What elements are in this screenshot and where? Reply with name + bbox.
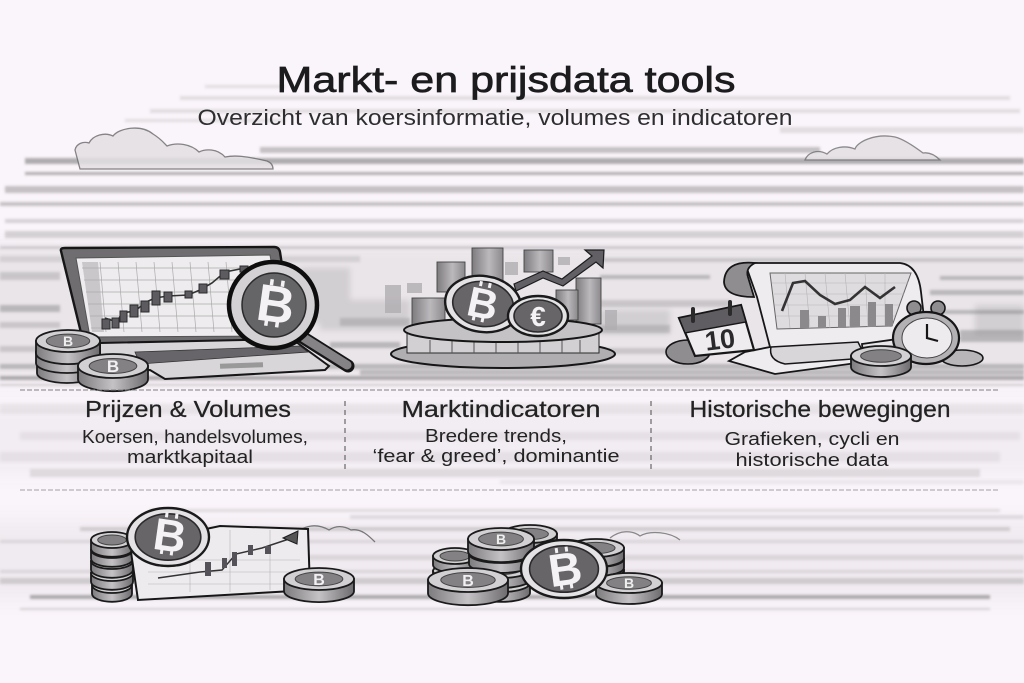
large bitcoin coin: B [150, 508, 190, 563]
background: soft grey washes [0, 245, 1024, 600]
bitcoin coin: B [463, 277, 503, 330]
calendar: 10 [703, 323, 737, 357]
small coin: B [313, 572, 325, 589]
divider: lower dashed line [20, 489, 1000, 491]
cloud: top left [75, 128, 273, 169]
bitcoin coin [441, 271, 525, 337]
pale distant bars [385, 257, 617, 330]
coin stack [91, 532, 133, 602]
front coin [78, 354, 148, 391]
small coin [284, 568, 354, 602]
coin stack [36, 330, 100, 383]
divider: column one and two [344, 401, 346, 469]
cloud: top right [805, 136, 940, 160]
chart card [131, 526, 310, 600]
description line 1: Koersen, handelsvolumes, [82, 427, 308, 447]
subtitle: Overzicht van koersinformatie, volumes en indicatoren [198, 105, 792, 130]
platform [391, 318, 615, 368]
title: Markt- en prijsdata tools [276, 59, 736, 100]
divider: upper dashed line [20, 389, 1000, 391]
bars [412, 248, 601, 326]
cloud: bottom centre [295, 526, 375, 542]
coin stack: B [63, 333, 73, 349]
laptop lid [61, 247, 294, 345]
cloud: bottom right [610, 532, 680, 540]
column: prijzen en volumes [82, 396, 308, 467]
description line 2: ‘fear & greed’, dominantie [372, 446, 620, 466]
heading: Historische bewegingen [690, 396, 950, 422]
rising arrow [514, 250, 604, 291]
laptop base and keyboard [100, 339, 329, 379]
chart scroll [724, 263, 926, 374]
laptop screen with chart [76, 255, 284, 337]
heading: Prijzen & Volumes [85, 396, 291, 422]
clock [893, 301, 959, 364]
large bitcoin coin [127, 508, 209, 566]
front left coin [428, 568, 508, 605]
illustration: piles of bitcoin coins [428, 525, 662, 605]
coin right of clock [941, 350, 983, 366]
large bitcoin coin [521, 540, 607, 598]
calendar [679, 302, 754, 357]
description line 2: historische data [736, 450, 890, 470]
illustration: coin stack with price chart card [91, 508, 354, 602]
middle pile [468, 528, 534, 602]
right pile [568, 539, 624, 587]
illustration: calendar, chart scroll and clock [666, 263, 983, 377]
euro coin: € [530, 301, 546, 332]
background: distant skyline shading [300, 268, 1024, 335]
heading: Marktindicatoren [402, 396, 600, 422]
left pile [433, 548, 477, 586]
divider: column two and three [650, 401, 652, 469]
front left coin: B [462, 573, 474, 590]
magnifier: B [253, 274, 298, 336]
coin behind calendar [666, 340, 710, 364]
illustration: market platform with bitcoin and euro coins [385, 248, 617, 368]
front coin: B [107, 357, 119, 376]
background: sketched horizontal streaks [0, 85, 1024, 610]
column: historische bewegingen [690, 396, 950, 470]
middle pile: B [496, 531, 506, 547]
magnifier [229, 262, 348, 366]
front coin [851, 346, 911, 377]
description line 2: marktkapitaal [127, 447, 253, 467]
description line 1: Grafieken, cycli en [724, 429, 900, 449]
column: marktindicatoren [372, 396, 620, 466]
right coin [596, 573, 662, 604]
euro coin [508, 296, 568, 336]
right coin: B [624, 575, 634, 591]
back pile [503, 525, 557, 553]
description line 1: Bredere trends, [425, 426, 567, 446]
illustration: laptop with bitcoin magnifier [36, 247, 348, 391]
large bitcoin coin: B [545, 541, 585, 597]
